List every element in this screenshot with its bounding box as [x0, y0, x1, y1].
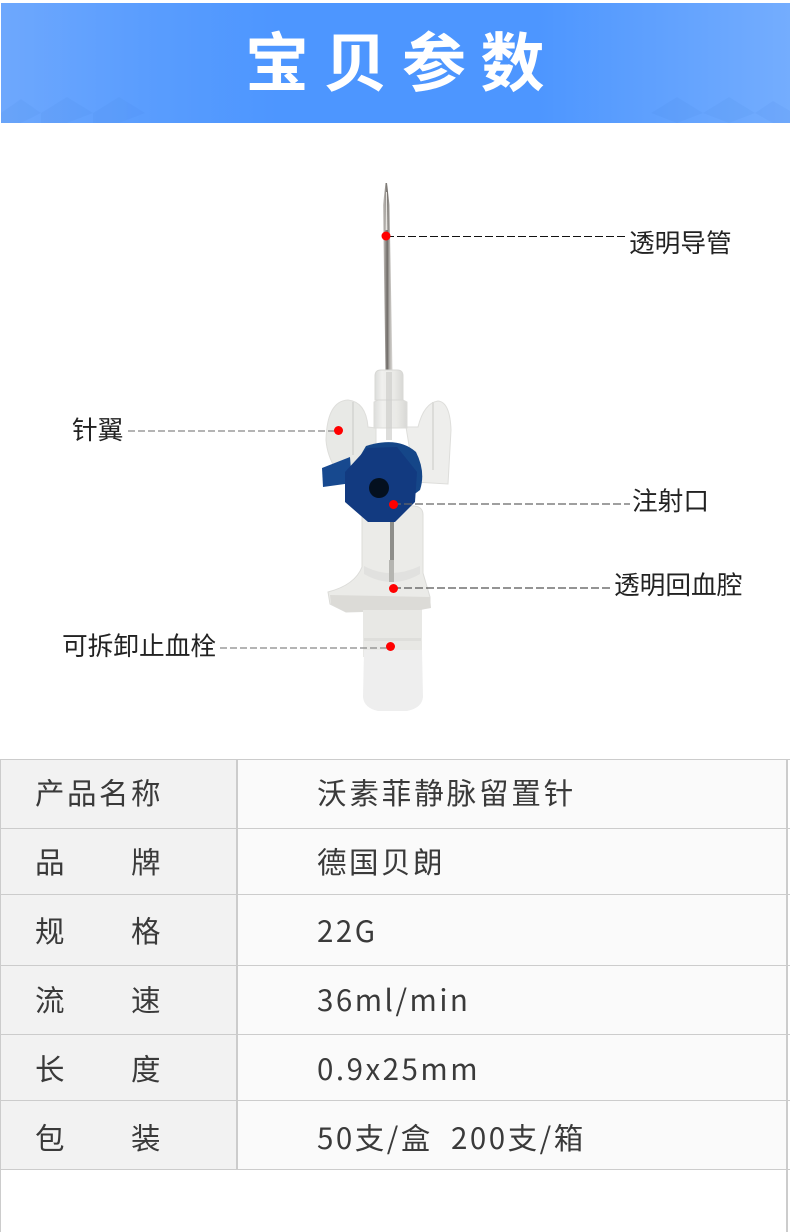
row: length — [35, 1047, 480, 1089]
callout: 针翼: 针翼 — [72, 416, 123, 445]
row: length: 0.9x25mm — [317, 1047, 480, 1089]
callout: 透明回血腔: 透明回血腔 — [614, 571, 742, 600]
row: flow rate: 速 — [131, 978, 163, 1020]
row: flow rate: 流 — [35, 978, 67, 1020]
product diagram — [62, 183, 742, 711]
row: packaging: 包 — [35, 1116, 67, 1158]
row: flow rate: 36ml/min — [317, 978, 470, 1020]
row: brand — [35, 840, 445, 882]
row: gauge: 格 — [131, 909, 163, 951]
row: gauge: 规 — [35, 909, 67, 951]
callout: 可拆卸止血栓 — [62, 632, 395, 661]
row: product name: 沃素菲静脉留置针 — [317, 771, 576, 813]
blue port — [322, 457, 352, 487]
row: gauge — [35, 909, 378, 951]
row: brand: 品 — [35, 840, 67, 882]
header banner — [1, 3, 790, 123]
callout: 透明导管 — [382, 229, 732, 258]
callout: 针翼 — [72, 416, 343, 445]
needle — [383, 183, 392, 372]
row: flow rate — [35, 978, 470, 1020]
row: packaging: 装 — [131, 1116, 163, 1158]
row: brand: 德国贝朗 — [317, 840, 445, 882]
hub — [374, 400, 407, 428]
callout: 透明导管: 透明导管 — [629, 229, 732, 258]
row: brand: 牌 — [131, 840, 163, 882]
row: packaging: 50支/盒 200支/箱 — [317, 1116, 586, 1158]
row: packaging — [35, 1116, 586, 1158]
title: 宝贝参数 — [245, 13, 559, 105]
row: length: 度 — [131, 1047, 163, 1089]
flash chamber and flange — [328, 506, 430, 612]
callout: 注射口: 注射口 — [632, 487, 709, 516]
callout: 透明回血腔 — [389, 571, 742, 600]
stopper plug — [363, 610, 422, 657]
row: length: 长 — [35, 1047, 67, 1089]
callout: 注射口 — [389, 487, 709, 516]
parameter table — [0, 759, 790, 1232]
wings — [326, 400, 376, 470]
callout: 可拆卸止血栓: 可拆卸止血栓 — [62, 632, 216, 661]
row: product name: 产品名称 — [35, 771, 163, 813]
icon: IV catheter illustration — [322, 183, 451, 711]
row: product name — [35, 771, 576, 813]
row: gauge: 22G — [317, 909, 378, 951]
